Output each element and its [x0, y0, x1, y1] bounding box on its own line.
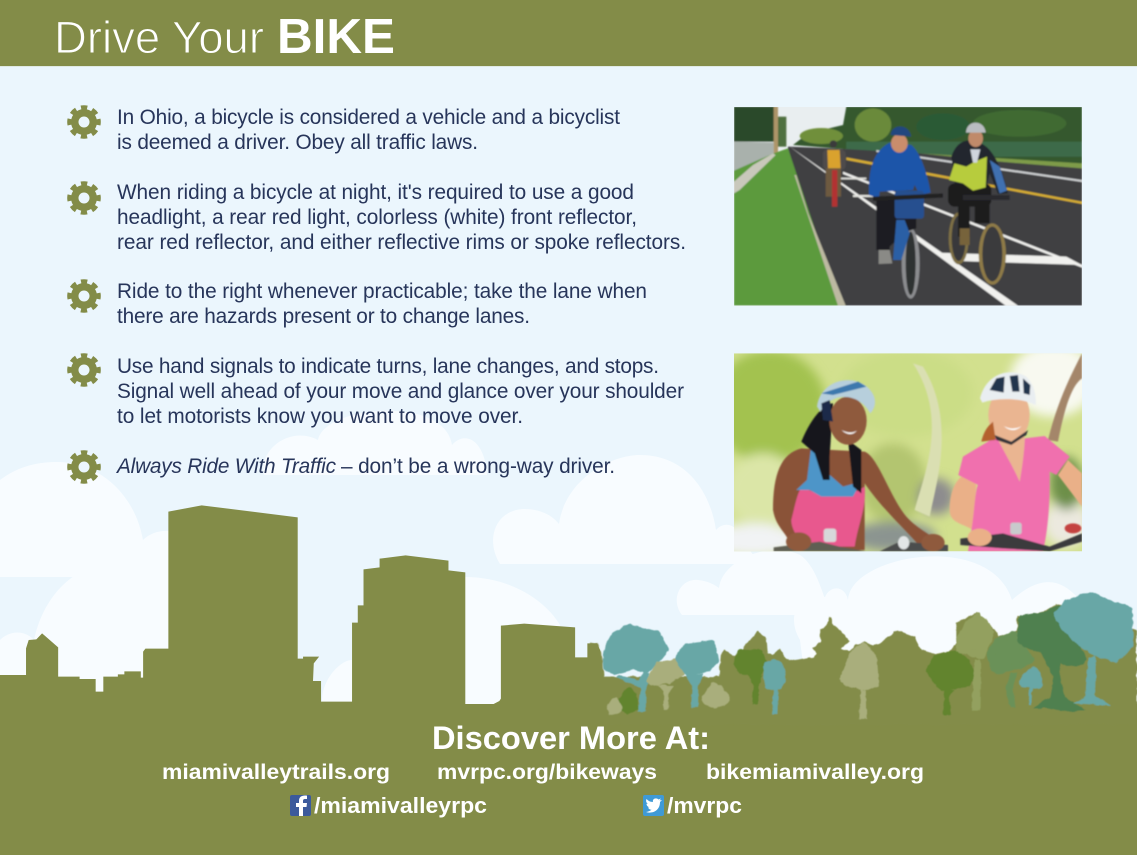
website links: miamivalleytrails.org: [162, 761, 390, 784]
text block: Always Ride With Traffic: [115, 455, 337, 478]
tree: mid olive: [960, 616, 990, 711]
tree: teal: [679, 643, 716, 707]
bicycle handlebars: [774, 523, 1082, 551]
shrub: light small: [610, 701, 619, 711]
photo: two women on bikes: [734, 353, 1082, 552]
header band: [0, 0, 1137, 67]
text block: Ride to the right whenever practicable; take the lane when: [117, 280, 647, 303]
tree: light: [650, 662, 681, 709]
background clouds: [0, 411, 1137, 720]
website links: mvrpc.org/bikeways: [437, 761, 657, 784]
title: [54, 10, 395, 64]
tip 4: [70, 355, 684, 428]
tip 1: [70, 106, 620, 154]
tree: teal large: [1057, 595, 1130, 706]
tree: teal: [606, 627, 665, 712]
tree: pale: [843, 646, 875, 719]
twitter handle: /mvrpc: [667, 793, 742, 818]
text block: When riding a bicycle at night, it's required to use a good: [117, 181, 634, 204]
heading: Discover More At:: [432, 720, 710, 756]
website links: [162, 761, 924, 784]
tip 2: [70, 181, 686, 254]
woman left: [773, 380, 944, 550]
cyclist: blue jacket: [869, 126, 943, 299]
text block: is deemed a driver. Obey all traffic laws.: [117, 131, 478, 154]
tree line: [590, 595, 1137, 725]
title: Drive Your: [54, 12, 264, 63]
tree: sage: [990, 634, 1031, 708]
text block: In Ohio, a bicycle is considered a vehicle and a bicyclist: [117, 106, 620, 129]
city skyline silhouette: [0, 505, 1137, 855]
footer call to action: [162, 720, 924, 818]
photo: cyclists on a road: [734, 107, 1082, 307]
icon: gear: [70, 282, 98, 310]
website links: bikemiamivalley.org: [706, 761, 924, 784]
woman right: [950, 372, 1082, 551]
tip 3: [70, 280, 647, 328]
text block: [115, 455, 615, 478]
text block: [117, 280, 647, 328]
far cyclist: [823, 140, 846, 207]
tree: forest green: [1020, 608, 1085, 712]
tip 5: [70, 452, 615, 482]
text block: there are hazards present or to change lanes.: [117, 305, 530, 328]
icon: gear: [70, 356, 98, 384]
text block: – don’t be a wrong-way driver.: [341, 455, 615, 478]
icon: facebook: [290, 795, 311, 816]
icon: gear: [70, 184, 98, 212]
text block: headlight, a rear red light, colorless (white) front reflector,: [117, 206, 637, 229]
tree: teal small: [767, 662, 783, 714]
title: BIKE: [277, 10, 395, 64]
tree: teal tiny: [1023, 670, 1039, 705]
shrub: light: [706, 685, 726, 705]
icon: gear: [70, 108, 98, 136]
text block: [117, 181, 686, 254]
text block: Signal well ahead of your move and glance over your shoulder: [117, 380, 684, 403]
text block: [117, 355, 684, 428]
cyclist: yellow vest: [948, 123, 1010, 285]
tree: dark green large: [930, 653, 971, 715]
shrub: dark green: [622, 691, 634, 711]
text block: [117, 106, 620, 154]
icon: gear: [70, 452, 98, 482]
icon: twitter: [643, 795, 664, 816]
tree: dark green: [738, 652, 764, 705]
text block: Use hand signals to indicate turns, lane changes, and stops.: [117, 355, 659, 378]
text block: rear red reflector, and either reflective rims or spoke reflectors.: [117, 231, 686, 254]
text block: to let motorists know you want to move over.: [117, 405, 523, 428]
tree background hills: [590, 603, 1137, 725]
facebook handle: /miamivalleyrpc: [314, 793, 487, 818]
